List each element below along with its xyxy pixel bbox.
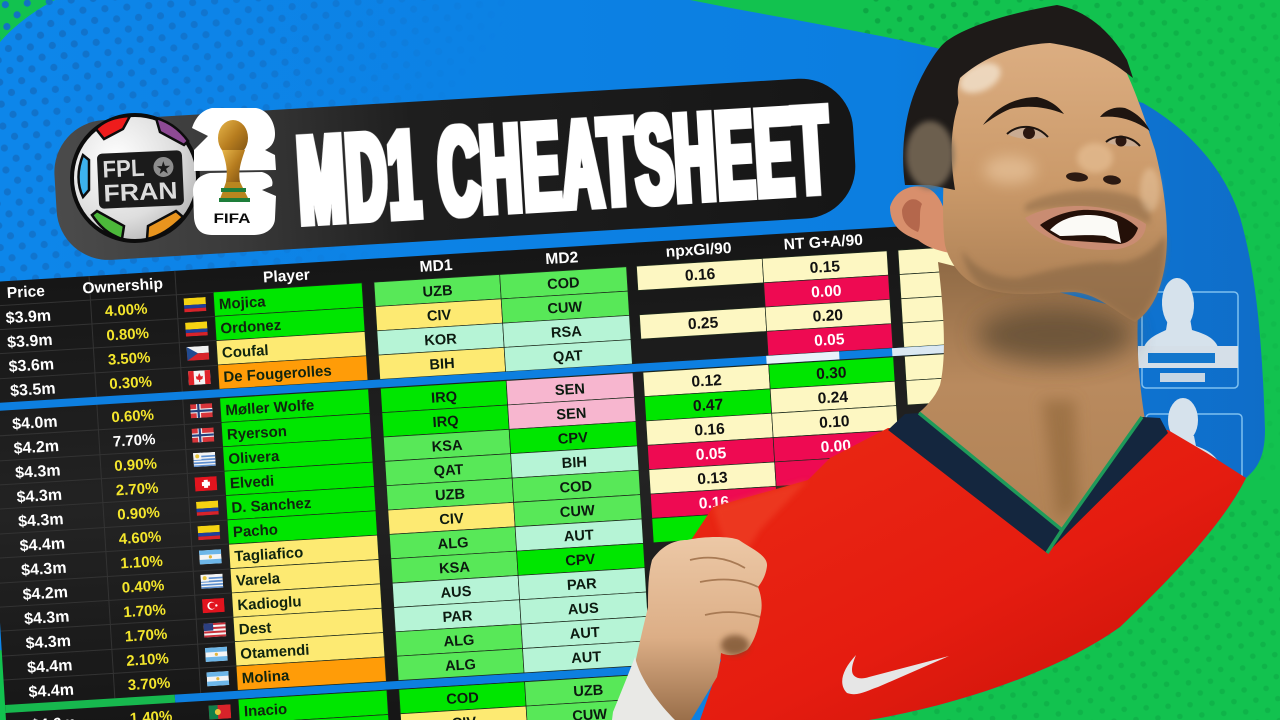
row: Kadioglu: PAR [566, 576, 598, 594]
row: De Fougerolles [10, 320, 944, 397]
mouth [1040, 210, 1138, 244]
row: Ryerson: 0.47 [692, 396, 724, 415]
table headers: NT G+A/90 [783, 232, 864, 254]
row: Ryerson: $4.2m [13, 438, 60, 458]
teeth [1050, 215, 1121, 243]
panel: red ball segment [96, 116, 130, 139]
label plate: FPL Fran [97, 150, 184, 209]
FIFA wordmark: FIFA [214, 210, 250, 226]
row: Elvedi: QAT [433, 462, 464, 480]
row: Inacio [30, 674, 653, 720]
forehead highlight [955, 57, 1005, 99]
row: De Fougerolles: $3.5m [10, 380, 56, 400]
player photo illustration [612, 5, 1246, 720]
label plate: FPL Fran: FRAN [103, 177, 178, 208]
nose [1077, 143, 1113, 173]
row: De Fougerolles: De Fougerolles [223, 362, 332, 386]
row: Olivera: $4.3m [15, 462, 61, 482]
wristband [612, 657, 675, 720]
row: Olivera: KSA [431, 438, 463, 456]
row: Ordonez: CIV [426, 307, 452, 325]
row: Elvedi [16, 430, 899, 508]
row: Mojica: 0.15 [809, 258, 841, 277]
row: Otamendi: 2.10% [126, 650, 169, 670]
left eye [1007, 127, 1048, 139]
row: Molina: Molina [241, 667, 290, 687]
row: Olivera: 0.90% [114, 455, 157, 475]
row: Ryerson: Ryerson [226, 423, 287, 444]
row: Varela: 0.40% [121, 577, 165, 597]
section divider band upper [0, 345, 944, 411]
blue halftone dots top left [0, 0, 425, 281]
row: Pacho [19, 486, 778, 557]
row: Moller Wolfe: $4.0m [12, 414, 58, 433]
row: D. Sanchez: COD [559, 479, 593, 497]
row: Elvedi: 0.00 [820, 437, 852, 456]
jersey [680, 428, 1246, 720]
numeral 2 shape [192, 108, 276, 171]
face [943, 39, 1167, 322]
fist [635, 537, 767, 720]
row: partial last row [294, 700, 618, 720]
label plate: FPL Fran: FPL [102, 155, 145, 184]
panel: purple ball segment [156, 118, 188, 145]
row: Mojica: UZB [422, 283, 453, 301]
row: Coufal: $3.6m [8, 356, 55, 376]
row: Olivera: 0.16 [694, 421, 726, 439]
row: Ryerson: 7.70% [112, 431, 156, 451]
row: Coufal: 0.25 [687, 314, 719, 333]
table headers: Price [6, 283, 46, 302]
row: Kadioglu [23, 568, 646, 630]
row: De Fougerolles: QAT [553, 348, 583, 366]
row: De Fougerolles: 0.05 [814, 331, 845, 350]
row: Moller Wolfe [12, 354, 944, 430]
cheek highlight [984, 156, 1036, 184]
panel: orange ball segment [147, 211, 183, 239]
row: Pacho: $4.4m [19, 535, 66, 555]
row: Otamendi: Otamendi [240, 642, 310, 663]
row: Olivera: CPV [557, 430, 589, 448]
row: Coufal: RSA [551, 324, 583, 342]
row: Coufal: 3.50% [107, 349, 151, 369]
row: Moller Wolfe: 0.60% [111, 407, 154, 426]
table column rules [0, 269, 238, 705]
panel: blue ball segment [78, 155, 89, 197]
row: Molina: $4.4m [28, 681, 74, 701]
row: Molina: 3.70% [127, 675, 171, 694]
player card icon upper [1138, 277, 1238, 388]
fist shadow [721, 635, 749, 655]
row: Otamendi: ALG [443, 633, 475, 650]
row: Coufal: 0.20 [812, 307, 844, 326]
row: Varela [22, 543, 645, 606]
stubble jaw shading [962, 235, 1166, 322]
table headers: npxGI/90 [665, 240, 732, 261]
right eye [1106, 136, 1140, 146]
row: Elvedi: BIH [561, 455, 587, 472]
row: Pacho: 4.60% [118, 528, 162, 548]
row: D. Sanchez: D. Sanchez [231, 495, 312, 517]
row: Tagliafico: Tagliafico [234, 544, 304, 565]
row: Ordonez [8, 272, 942, 348]
table headers [6, 232, 864, 302]
row: Tagliafico: $4.3m [21, 560, 67, 579]
nostrils [1066, 172, 1122, 186]
row: Coufal: KOR [424, 331, 458, 349]
row: Moller Wolfe: SEN [554, 381, 585, 399]
lips [1025, 206, 1146, 250]
hair fade [906, 121, 954, 189]
row: Coufal [8, 294, 972, 378]
table headers: Ownership [82, 276, 163, 297]
row: Pacho: Pacho [232, 521, 278, 541]
row: Moller Wolfe: 0.30 [816, 364, 847, 383]
row: Molina: ALG [445, 657, 476, 675]
row: D. Sanchez: 0.13 [697, 469, 729, 488]
row: Elvedi: 0.05 [695, 445, 727, 464]
table headers: MD1 [419, 257, 453, 276]
player card icon lower [1146, 398, 1242, 484]
row: Varela: Varela [235, 570, 281, 590]
row: Molina [28, 641, 651, 703]
row: Ryerson [14, 378, 942, 455]
label plate: FPL Fran: ★ [156, 160, 171, 177]
row: Ordonez: $3.9m [7, 332, 53, 352]
neck centre shadow [1042, 400, 1078, 520]
row: Elvedi: 2.70% [115, 480, 159, 499]
icon: world cup trophy [218, 120, 250, 202]
row: Dest [25, 592, 648, 654]
row: Mojica: 0.16 [684, 266, 716, 285]
row: Ryerson: IRQ [432, 414, 459, 431]
jersey shoulder fold [713, 480, 808, 570]
background: green halftone dots top right [863, 0, 1280, 282]
row: Coufal: Coufal [221, 342, 269, 362]
row: Tagliafico: AUT [563, 527, 594, 545]
stats table [0, 221, 1017, 720]
title text: MD1 CHEATSHEET [294, 81, 834, 251]
row: Otamendi [26, 616, 649, 679]
left eyebrow [983, 97, 1064, 125]
row: D. Sanchez [18, 458, 830, 528]
row: Mojica: 4.00% [104, 301, 148, 320]
row: Molina: AUT [571, 649, 602, 667]
collar: navy [888, 413, 1168, 553]
row: Moller Wolfe: Møller Wolfe [225, 397, 315, 419]
row: Inacio: UZB [573, 682, 604, 700]
row: Moller Wolfe: IRQ [431, 389, 458, 407]
numeral 6 shape [193, 172, 276, 235]
row: Kadioglu: AUS [440, 584, 472, 602]
row: Inacio: COD [446, 690, 479, 708]
row: Mojica: COD [547, 275, 580, 293]
row: Ordonez: 0.80% [106, 325, 149, 345]
row: Elvedi: Elvedi [229, 473, 275, 492]
icon: swoosh [842, 655, 949, 694]
collar: green trim [919, 413, 1142, 553]
right eyebrow [1100, 107, 1150, 131]
row: Dest: AUS [567, 600, 599, 618]
row: D. Sanchez: UZB [435, 486, 466, 504]
row: Dest: 1.70% [124, 626, 168, 645]
row: Otamendi: AUT [569, 625, 600, 643]
neck shadow under jaw [977, 307, 1133, 363]
row: Varela: KSA [439, 559, 471, 577]
row: Mojica: $3.9m [5, 307, 52, 327]
hair [903, 5, 1133, 190]
row: Inacio: Inacio [243, 701, 288, 720]
row: Mojica: Mojica [218, 293, 267, 313]
row: Dest: Dest [238, 620, 272, 638]
background: green halftone dots bottom right [860, 500, 1280, 720]
row: D. Sanchez: 0.90% [117, 504, 160, 524]
row: Tagliafico: ALG [437, 535, 469, 553]
moustache shading [1025, 190, 1150, 225]
row: Mojica [5, 246, 969, 329]
row: Pacho: CIV [439, 511, 464, 528]
fist knuckle lines [690, 558, 760, 617]
ear [890, 186, 950, 253]
table background [0, 221, 1016, 720]
row: Moller Wolfe: 0.12 [691, 372, 723, 391]
row: Olivera: 0.10 [819, 413, 850, 432]
row: Ordonez: Ordonez [220, 317, 282, 338]
row: Ryerson: 0.24 [817, 389, 849, 408]
row: Ordonez: 0.00 [811, 283, 842, 301]
row: Kadioglu: 1.70% [123, 602, 166, 621]
title banner [51, 76, 858, 265]
row: Varela: CPV [565, 552, 596, 570]
table headers: MD2 [545, 249, 579, 268]
row: Kadioglu: $4.3m [24, 608, 70, 628]
row: Elvedi: $4.3m [16, 487, 63, 506]
row: D. Sanchez: $4.3m [18, 511, 64, 531]
row: Otamendi: $4.4m [27, 657, 73, 677]
row: De Fougerolles: 0.30% [109, 373, 152, 393]
row: Olivera [14, 406, 898, 484]
logo: FPL Fran ball [72, 115, 198, 241]
row: Ryerson: SEN [556, 406, 587, 423]
right cheek highlight [1140, 168, 1160, 212]
table headers: Player [263, 267, 310, 286]
panel: green ball segment [92, 211, 124, 239]
ear inner [902, 199, 922, 232]
row: De Fougerolles: BIH [429, 356, 455, 373]
logo: FIFA 26 emblem [192, 108, 276, 235]
row: Tagliafico [22, 514, 708, 576]
row: Varela: $4.2m [22, 584, 69, 604]
row: Pacho: CUW [559, 503, 595, 521]
section divider band lower [5, 666, 632, 713]
row: Kadioglu: Kadioglu [237, 593, 302, 614]
row: Olivera: Olivera [228, 448, 280, 468]
row: Dest: PAR [442, 608, 473, 626]
row: Dest: $4.3m [25, 633, 71, 653]
row: Pacho: 0.16 [698, 494, 730, 513]
row: Tagliafico: 1.10% [120, 553, 163, 572]
neck [915, 262, 1145, 536]
row: Ordonez: CUW [547, 299, 583, 318]
